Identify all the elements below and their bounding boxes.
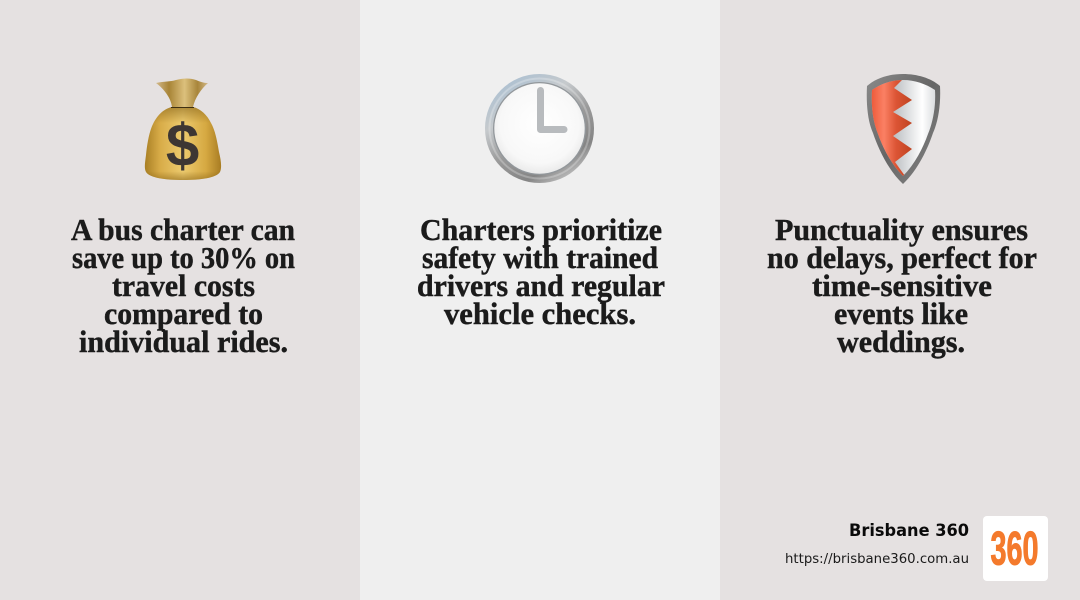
icon: shield — [865, 74, 941, 184]
icon: clock — [485, 74, 594, 183]
text: cost savings: save up to 30% on — [72, 240, 295, 275]
text: punctuality: no delays, perfect for — [767, 240, 1037, 275]
text: cost savings: travel costs — [112, 268, 255, 303]
panel: cost savings — [0, 0, 360, 600]
text: cost savings — [71, 212, 295, 359]
logo: 360: 360 — [990, 522, 1038, 574]
text: safety: safety with trained — [422, 240, 658, 275]
text: cost savings: individual rides. — [79, 324, 288, 359]
text: safety: vehicle checks. — [444, 296, 636, 331]
text: punctuality: weddings. — [837, 324, 965, 359]
icon: money bag — [145, 78, 221, 180]
text: punctuality: Punctuality ensures — [775, 212, 1028, 247]
text: safety: drivers and regular — [417, 268, 665, 303]
text: cost savings: A bus charter can — [71, 212, 295, 247]
icon: money bag: $ — [166, 112, 199, 179]
text: punctuality: time-sensitive — [812, 268, 992, 303]
panel: punctuality — [720, 0, 1080, 600]
logo: 360 — [983, 516, 1048, 581]
text: safety: Charters prioritize — [420, 212, 662, 247]
text: cost savings: compared to — [104, 296, 263, 331]
text: punctuality: events like — [834, 296, 968, 331]
panel: safety — [360, 0, 720, 600]
text: safety — [417, 212, 665, 331]
brand url: https://brisbane360.com.au — [785, 552, 969, 567]
brand name: Brisbane 360 — [849, 521, 969, 540]
text: punctuality — [767, 212, 1037, 359]
